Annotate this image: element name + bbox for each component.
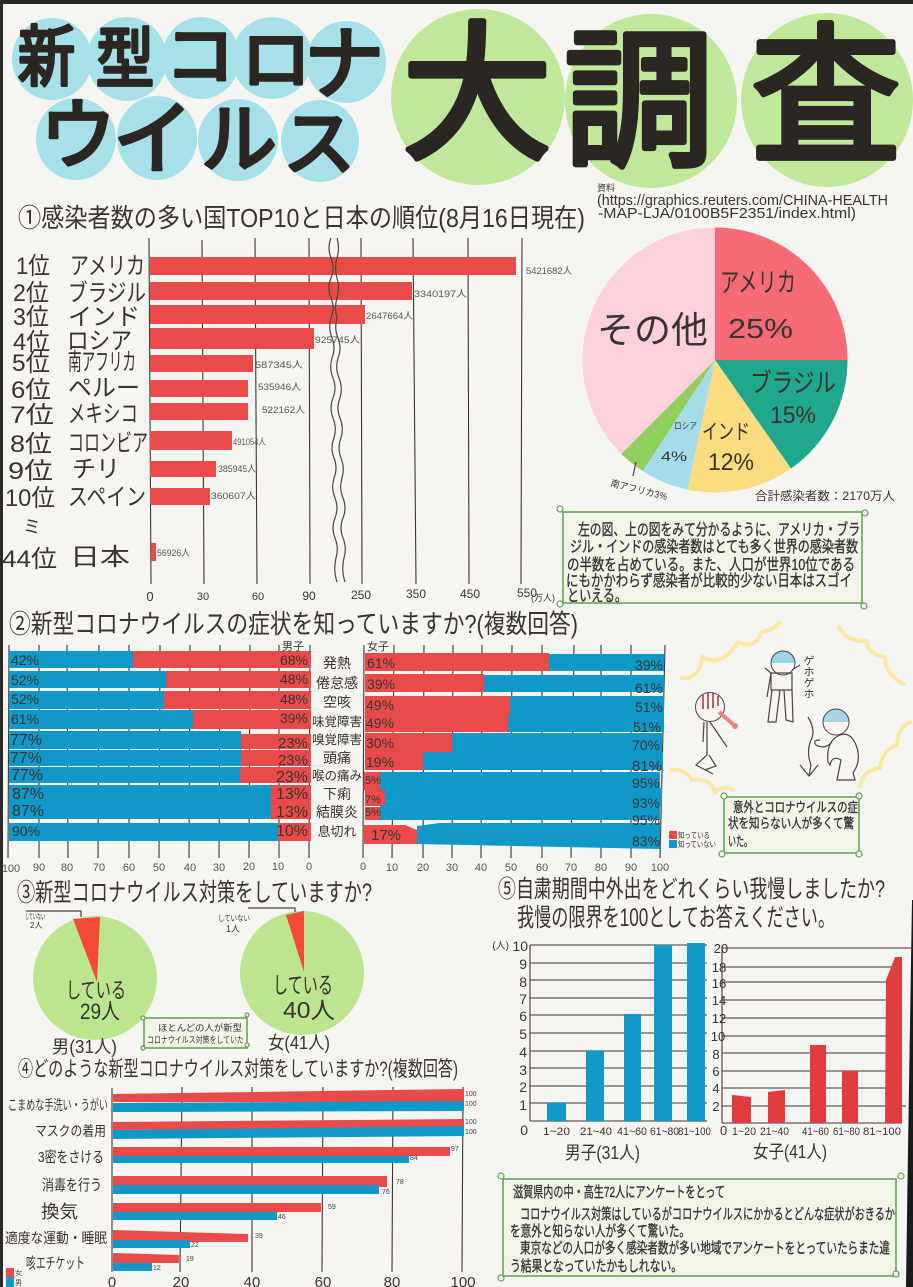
country rank labels: 5位 — [12, 350, 50, 377]
callout: conclusion — [498, 1173, 904, 1281]
value labels: 78 — [396, 1179, 404, 1186]
country rank labels: コロンビア — [68, 430, 148, 457]
axis labels: symptoms: 0 — [306, 861, 312, 873]
outer percentages: not knowing: 52% — [11, 672, 39, 688]
callout: symptoms comment — [719, 793, 862, 857]
inner percentages: knowing: 7% — [365, 794, 381, 806]
heading: section 4: ④どのような新型コロナウイルス対策をしていますか?(複数回答) — [18, 1058, 458, 1081]
chart: girls countermeasure pie: 女(41人) — [268, 1033, 330, 1053]
axis labels: 6 — [712, 1064, 720, 1079]
chart: boys patience bars — [492, 938, 711, 1163]
chart: infections bar chart — [2, 238, 572, 604]
country rank labels: 日本 — [70, 544, 130, 571]
chart: world share pie: 合計感染者数：2170万人 — [755, 488, 895, 503]
axis labels: 12 — [712, 1011, 726, 1026]
symptom names: 倦怠感 — [316, 675, 358, 691]
outer percentages: not knowing: 51% — [633, 719, 661, 735]
axis labels: symptoms: 100 — [651, 862, 669, 874]
axis labels: 7 — [519, 991, 527, 1007]
inner percentages: knowing: 48% — [280, 691, 308, 707]
axis labels: 4 — [519, 1044, 527, 1060]
callout: section 1 comment — [557, 506, 868, 609]
outer percentages: not knowing: 93% — [632, 795, 660, 811]
axis labels: symptoms: 10 — [272, 861, 284, 873]
chart: girls patience bars: 81~100 — [863, 1126, 901, 1138]
value labels: 46 — [278, 1214, 286, 1221]
callout: symptoms comment: 状を知らない人が多くて驚 — [728, 815, 854, 831]
inner percentages: knowing: 23% — [278, 752, 308, 769]
value labels: 535946人 — [258, 382, 302, 393]
axis labels: 6 — [519, 1008, 527, 1024]
inner percentages: knowing: 39% — [280, 710, 308, 726]
chart: world share pie: 4% — [661, 448, 687, 464]
title: 新型コロナウイルス: イ — [113, 95, 193, 184]
value labels: 5421682人 — [526, 266, 572, 277]
inner percentages: knowing — [365, 655, 401, 844]
title: 大調査: 大 — [402, 11, 552, 179]
chart: girls patience bars: 41~60 — [802, 1126, 829, 1138]
country rank labels: ブラジル — [68, 280, 146, 307]
country rank labels: 4位 — [13, 329, 50, 356]
axis labels: symptoms: 40 — [475, 862, 487, 874]
chart: girls patience bars: 女子(41人) — [753, 1142, 827, 1162]
inner percentages: knowing: 5% — [365, 775, 381, 787]
axis labels: 60 — [252, 591, 264, 603]
inner percentages: knowing: 30% — [366, 735, 394, 751]
inner percentages: knowing: 10% — [276, 823, 308, 840]
axis labels: symptoms: 60 — [123, 862, 135, 874]
country rank labels: アメリカ — [70, 253, 145, 280]
chart: boys patience bars: 男子(31人) — [565, 1143, 640, 1163]
value labels: 59 — [328, 1204, 336, 1211]
chart: girls countermeasure pie: していない — [218, 914, 250, 923]
country rank labels: 1位 — [16, 253, 50, 280]
legend: symptoms: 知っている — [678, 830, 710, 840]
chart: girls patience bars — [711, 941, 913, 1162]
outer percentages: not knowing: 87% — [12, 786, 44, 803]
chart: boys countermeasure pie: 29人 — [80, 999, 120, 1024]
axis labels: 8 — [519, 974, 527, 990]
axis labels: 4 — [712, 1081, 720, 1096]
chart: world share pie: ロシア — [674, 421, 697, 431]
outer percentages: not knowing: 52% — [11, 691, 39, 707]
outer percentages: not knowing: 42% — [11, 652, 39, 668]
country rank labels: 7位 — [10, 402, 54, 429]
axis labels: 5 — [519, 1026, 527, 1042]
outer percentages: not knowing: 77% — [10, 732, 42, 749]
value labels: 3340197人 — [414, 289, 468, 300]
row labels — [5, 1097, 108, 1272]
chart: boys patience bars: 21~40 — [580, 1126, 612, 1138]
axis labels: 16 — [712, 976, 726, 991]
callout: most take measures: ほとんどの人が新型 — [158, 1022, 242, 1033]
axis labels: 10 — [512, 938, 528, 954]
axis labels: symptoms: 50 — [505, 862, 517, 874]
bars — [150, 257, 516, 561]
outer percentages: not knowing: 81% — [632, 758, 662, 775]
icon: figure with stomach ache — [800, 709, 858, 780]
axis labels: symptoms: 90 — [33, 862, 45, 874]
value labels: 385945人 — [218, 464, 256, 475]
chart: world share pie — [582, 227, 895, 503]
axis labels: symptoms: 20 — [417, 862, 429, 874]
axis labels: 30 — [197, 591, 209, 603]
title: 新型コロナウイルス: ナ — [304, 20, 384, 109]
axis labels: 0 — [520, 1122, 528, 1138]
title: 新型コロナウイルス: ウ — [40, 94, 116, 179]
axis labels: 2 — [519, 1079, 527, 1095]
chart: countermeasures bars — [5, 1087, 477, 1287]
symptom names: 下痢 — [323, 786, 351, 802]
axis labels: symptoms: 30 — [213, 862, 225, 874]
value labels: 100 — [465, 1091, 477, 1098]
axis labels: symptoms: 70 — [565, 862, 577, 874]
country rank labels: 9位 — [8, 458, 53, 485]
axis labels: symptoms: 50 — [153, 862, 165, 874]
title: 新型コロナウイルス: 型 — [96, 22, 154, 96]
chart: girls patience bars: 0 — [720, 1123, 727, 1138]
row labels: 咳エチケット — [26, 1255, 85, 1272]
country rank labels: チリ — [72, 456, 120, 483]
chart: world share pie: 12% — [708, 449, 754, 476]
chart: world share pie: ブラジル — [750, 368, 836, 398]
axis labels — [711, 941, 728, 1114]
value labels: 39 — [255, 1233, 263, 1240]
value labels: 84 — [410, 1155, 418, 1162]
axis labels: 8 — [712, 1047, 720, 1062]
value labels: 56926人 — [157, 548, 190, 559]
title: 新型コロナウイルス: 新 — [18, 20, 75, 94]
symptom names: 喉の痛み — [312, 769, 362, 783]
legend: 女 — [15, 1268, 22, 1277]
axis labels: symptoms: 20 — [243, 861, 255, 873]
outer percentages: not knowing: 95% — [632, 812, 660, 828]
outer percentages: not knowing: 77% — [10, 750, 42, 767]
yellow burst — [670, 621, 912, 792]
axis break — [329, 238, 345, 582]
value labels: 491054人 — [233, 437, 266, 448]
axis labels: 9 — [519, 956, 527, 972]
legend: symptoms — [669, 830, 716, 849]
inner percentages: knowing: 5% — [365, 807, 381, 819]
value labels: 100 — [465, 1129, 477, 1136]
inner percentages: knowing: 48% — [280, 671, 308, 687]
country rank labels: ロシア — [67, 328, 132, 355]
source citation: -MAP-LJA/0100B5F2351/index.html) — [598, 205, 856, 222]
axis labels: 20 — [714, 941, 728, 956]
inner percentages: knowing: 23% — [278, 735, 308, 752]
axis labels — [146, 586, 555, 604]
axis labels: symptoms: 80 — [61, 862, 73, 874]
source citation: (https://graphics.reuters.com/CHINA-HEALTH — [597, 192, 888, 209]
outer percentages: not knowing: 51% — [635, 699, 663, 715]
country rank labels: 10位 — [5, 485, 55, 512]
inner percentages: knowing: 23% — [276, 769, 308, 786]
axis labels: symptoms: 0 — [360, 861, 366, 873]
value labels: 587345人 — [255, 360, 304, 371]
chart: girls countermeasure pie: している — [273, 972, 333, 998]
row labels: マスクの着用 — [35, 1123, 106, 1139]
inner percentages: knowing — [276, 652, 308, 840]
title: 新型コロナウイルス — [12, 17, 386, 185]
inner percentages: knowing: 61% — [367, 655, 395, 671]
source citation: 資料 — [597, 182, 615, 193]
outer percentages: not knowing: 39% — [635, 657, 663, 673]
callout: symptoms comment: 意外とコロナウイルスの症 — [733, 800, 858, 815]
icon: coughing figure — [765, 651, 814, 722]
inner percentages: knowing: 49% — [366, 697, 394, 713]
heading: section 1: ①感染者数の多い国TOP10と日本の順位(8月16日現在) — [18, 203, 585, 233]
inner percentages: knowing: 19% — [366, 754, 394, 770]
chart: symptoms girls: 女子 — [367, 640, 389, 653]
axis labels: symptoms: 80 — [595, 862, 607, 874]
callout: conclusion: 滋賀県内の中・高生72人にアンケートをとって — [513, 1184, 725, 1201]
heading: section 3: ③新型コロナウイルス対策をしていますか? — [17, 879, 372, 907]
country rank labels: 44位 — [2, 546, 57, 573]
symptom names: 頭痛 — [323, 750, 351, 766]
axis labels: 250 — [351, 588, 371, 602]
chart: girls patience bars: 21~40 — [760, 1126, 789, 1138]
chart: world share pie: 25% — [728, 313, 793, 344]
country rank labels: メキシコ — [68, 401, 138, 428]
inner percentages: knowing: 13% — [276, 786, 308, 803]
axis labels: symptoms — [2, 861, 669, 875]
legend: symptoms: 知っていない — [678, 839, 716, 849]
title: 大調査: 査 — [751, 13, 901, 181]
country rank labels: ミ — [23, 517, 41, 537]
outer percentages: not knowing: 95% — [632, 775, 660, 791]
axis labels: symptoms: 60 — [536, 862, 548, 874]
chart: symptoms girls — [363, 640, 665, 858]
inner percentages: knowing: 17% — [371, 827, 401, 844]
legend — [6, 1268, 22, 1287]
chart: symptoms boys: 男子 — [282, 640, 304, 653]
country rank labels: ペルー — [68, 375, 140, 402]
callout: symptoms comment: いた。 — [728, 834, 752, 849]
country rank labels: 8位 — [10, 431, 52, 458]
callout: most take measures: コロナウイルス対策をしていた — [147, 1034, 244, 1045]
country rank labels: 3位 — [13, 304, 49, 331]
axis labels: (人) — [492, 941, 509, 952]
heading: section 5 — [498, 876, 885, 932]
country rank labels: 6位 — [11, 377, 51, 404]
chart: boys patience bars: 1~20 — [543, 1126, 570, 1138]
chart: world share pie: 15% — [770, 402, 816, 429]
source citation — [597, 182, 888, 222]
value labels: 19 — [186, 1256, 194, 1263]
symptom names — [312, 655, 362, 839]
axis labels: 550 — [517, 586, 537, 600]
chart: boys patience bars: 61~80 — [650, 1126, 679, 1138]
row labels: 換気 — [41, 1202, 78, 1222]
symptom names: 味覚障害 — [312, 714, 362, 729]
axis labels: 18 — [712, 960, 726, 975]
axis labels: symptoms: 30 — [446, 862, 458, 874]
axis labels: 450 — [460, 587, 480, 601]
outer percentages: not knowing — [10, 652, 44, 839]
symptom names: 発熱 — [323, 655, 351, 671]
country rank labels — [2, 253, 148, 573]
outer percentages: not knowing: 77% — [11, 767, 43, 784]
country rank labels: インド — [68, 304, 140, 331]
icon: figure with fever — [696, 692, 738, 774]
title: 大調査 — [391, 9, 913, 188]
axis labels: 10 — [711, 1029, 725, 1044]
value labels: 12 — [153, 1265, 161, 1272]
axis labels: symptoms: 90 — [625, 862, 637, 874]
row labels: 適度な運動・睡眠 — [5, 1230, 107, 1246]
outer percentages: not knowing: 83% — [632, 833, 660, 849]
axis labels — [492, 938, 528, 1138]
callout: section 1 comment: といえる。 — [567, 588, 627, 605]
value labels: 522162人 — [262, 405, 306, 416]
icon: coughing figure: ゲホゲホ — [802, 655, 814, 699]
axis labels: 0 — [146, 589, 154, 604]
outer percentages: not knowing: 70% — [632, 737, 660, 753]
axis labels: symptoms: 100 — [2, 863, 20, 875]
inner percentages: knowing: 13% — [276, 804, 308, 821]
axis labels: 90 — [302, 589, 316, 603]
value labels — [153, 1091, 477, 1272]
outer percentages: not knowing — [632, 657, 663, 849]
legend: 男 — [15, 1279, 22, 1287]
chart: world share pie: アメリカ — [720, 268, 796, 298]
chart: boys patience bars: 41~60 — [617, 1126, 647, 1138]
chart: boys countermeasure pie — [25, 911, 157, 1057]
outer percentages: not knowing: 90% — [12, 823, 40, 839]
inner percentages: knowing: 68% — [280, 652, 308, 668]
value labels: 97 — [451, 1146, 459, 1153]
title: 新型コロナウイルス: ス — [283, 105, 355, 185]
axis labels: 3 — [519, 1062, 527, 1078]
axis labels: (万人) — [531, 593, 555, 603]
row labels: 消毒を行う — [42, 1177, 102, 1194]
chart: boys countermeasure pie: している — [66, 978, 126, 1003]
outer percentages: not knowing: 61% — [11, 711, 39, 727]
title: 新型コロナウイルス: コ — [165, 19, 235, 93]
chart: world share pie: その他 — [597, 310, 708, 351]
chart: boys countermeasure pie: していない — [25, 912, 45, 921]
axis labels: symptoms: 40 — [184, 862, 196, 874]
value labels: 360607人 — [211, 491, 257, 502]
symptom names: 空咳 — [323, 694, 351, 710]
title: 新型コロナウイルス: ロ — [241, 23, 311, 97]
value labels: 76 — [382, 1189, 390, 1196]
illustration: symptoms sketch — [670, 621, 912, 792]
chart: boys patience bars: 81~100 — [678, 1126, 711, 1138]
axis labels: 14 — [712, 993, 726, 1008]
callout: most take measures — [141, 1013, 249, 1050]
axis labels: 2 — [712, 1099, 720, 1114]
symptom names: 結膜炎 — [316, 804, 358, 820]
value labels: 2647664人 — [366, 311, 414, 322]
chart: girls patience bars: 61~80 — [833, 1126, 860, 1138]
chart: girls countermeasure pie — [218, 908, 364, 1053]
symptom names: 息切れ — [317, 824, 357, 839]
country rank labels: 南アフリカ — [68, 349, 136, 376]
chart: girls patience bars: 1~20 — [732, 1126, 756, 1138]
country rank labels: スペイン — [68, 484, 146, 511]
title: 大調査: 調 — [564, 18, 714, 186]
outer percentages: not knowing: 61% — [635, 680, 663, 696]
chart: world share pie: インド — [702, 421, 750, 444]
row labels: 3密をさける — [38, 1149, 104, 1166]
country rank labels: 2位 — [13, 280, 49, 307]
axis labels — [108, 1274, 476, 1287]
value labels: 100 — [465, 1119, 477, 1126]
axis labels: symptoms: 70 — [93, 862, 105, 874]
heading: section 2: ②新型コロナウイルスの症状を知っていますか?(複数回答) — [9, 609, 578, 639]
callout: conclusion: を意外と知らない人が多くて驚いた。 — [510, 1222, 690, 1240]
chart: girls countermeasure pie: 1人 — [226, 924, 240, 934]
inner percentages: knowing: 49% — [366, 715, 394, 731]
axis labels: 350 — [406, 587, 426, 601]
axis labels: 1 — [519, 1097, 527, 1113]
chart: boys countermeasure pie: 2人 — [30, 921, 42, 930]
chart: symptoms boys — [8, 640, 311, 858]
chart: girls countermeasure pie: 40人 — [283, 997, 335, 1023]
callout: conclusion: う結果となっていたかもしれない。 — [510, 1258, 682, 1275]
chart: boys countermeasure pie: 男(31人) — [52, 1037, 117, 1057]
chart: world share pie: 南アフリカ3% — [609, 477, 669, 503]
value labels: 925745人 — [315, 335, 361, 346]
value labels — [157, 266, 572, 559]
row labels: こまめな手洗い・うがい — [8, 1097, 108, 1113]
value labels: 22 — [191, 1242, 199, 1249]
title: 新型コロナウイルス: ル — [201, 98, 277, 183]
axis labels: symptoms: 10 — [386, 862, 398, 874]
outer percentages: not knowing: 87% — [12, 803, 44, 820]
value labels: 100 — [465, 1101, 477, 1108]
inner percentages: knowing: 39% — [367, 676, 395, 692]
symptom names: 嗅覚障害 — [312, 732, 362, 747]
